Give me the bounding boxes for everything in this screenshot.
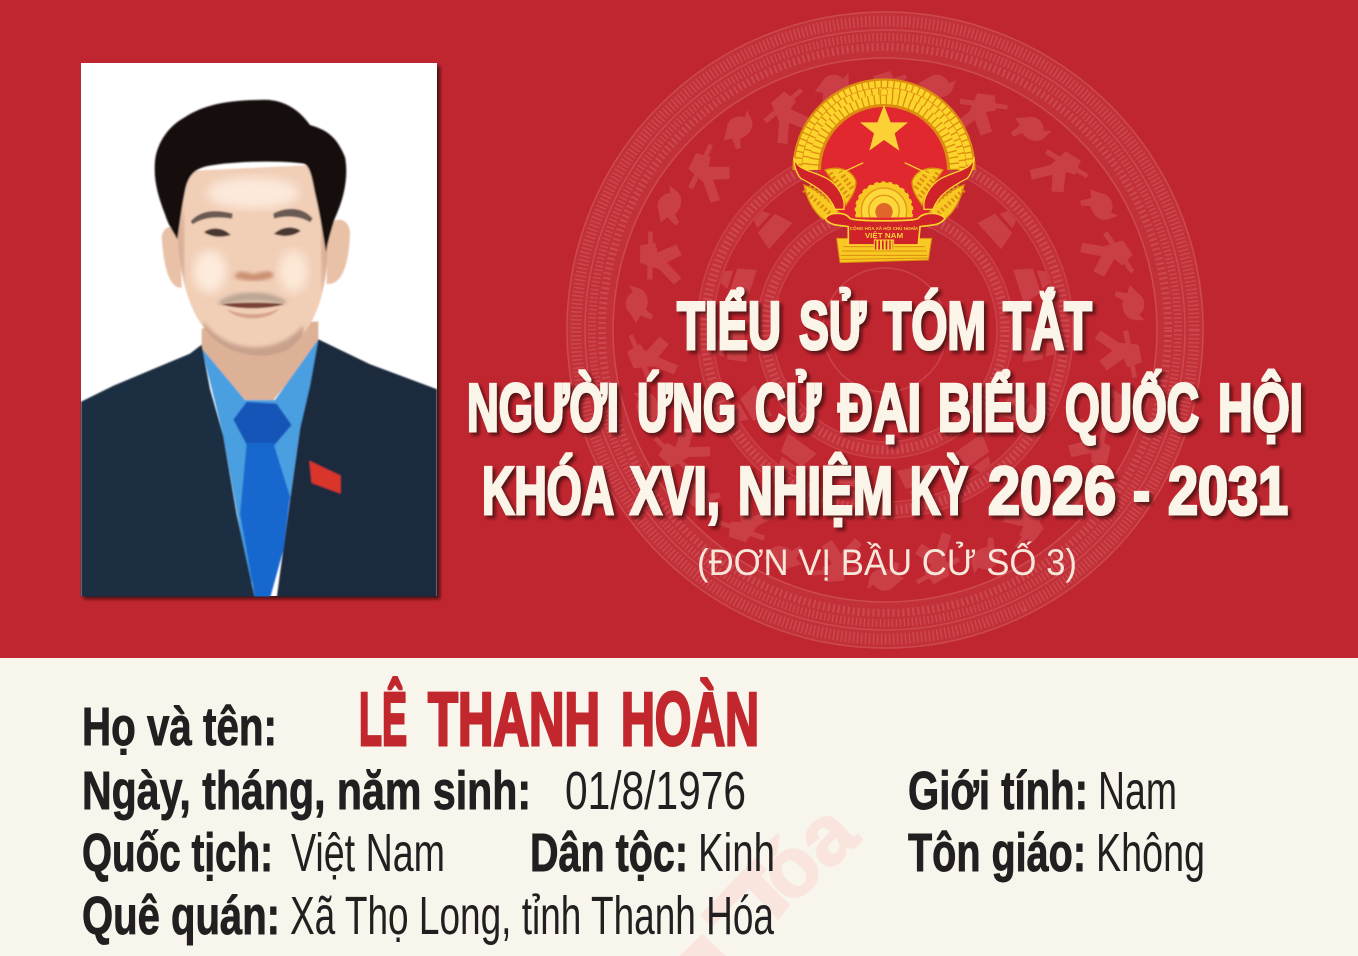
emblem text: VIỆT NAM: [865, 231, 903, 240]
gender label: Giới tính:: [908, 761, 1088, 821]
title line 2: [467, 369, 1303, 446]
bronze drum pattern: [543, 12, 1204, 677]
biography details: [82, 677, 1205, 946]
title line 1: TIỂU: [677, 287, 781, 364]
eyes: [204, 228, 301, 237]
title line 1: SỬ: [799, 287, 866, 364]
hometown label: Quê quán:: [82, 886, 280, 946]
eyebrows: [191, 209, 313, 224]
title line 1: [677, 287, 1092, 364]
religion label: Tôn giáo:: [908, 823, 1086, 883]
title line 3: KHÓA: [482, 453, 614, 529]
watermark: óa: [738, 784, 875, 920]
nationality: Việt Nam: [291, 823, 445, 883]
full name: THANH: [428, 677, 600, 761]
suit right: [277, 339, 437, 598]
star: [860, 105, 908, 151]
title line 3: [482, 452, 1288, 529]
nationality label: Quốc tịch:: [82, 823, 273, 883]
religion: Không: [1096, 823, 1205, 883]
ethnicity: Kinh: [698, 823, 775, 883]
body background: [0, 658, 1358, 956]
right wheat and ribbon: [905, 157, 974, 219]
full name: [359, 677, 759, 761]
wheat arch: [798, 84, 970, 170]
date of birth: 01/8/1976: [565, 761, 746, 821]
gear: [854, 181, 914, 218]
title line 2: HỘI: [1218, 369, 1303, 446]
title line 3: 2031: [1168, 453, 1288, 529]
ethnicity label: Dân tộc:: [530, 823, 688, 883]
emblem bars: [874, 240, 894, 250]
emblem text: CỘNG HÒA XÃ HỘI CHỦ NGHĨA: [850, 224, 919, 232]
left wheat and ribbon: [794, 157, 863, 219]
lapel pin: [309, 461, 341, 494]
emblem text: [850, 224, 919, 240]
subtitle: (ĐƠN VỊ BẦU CỬ SỐ 3): [697, 541, 1077, 583]
mouth: [222, 303, 284, 308]
face: [178, 164, 327, 356]
title line 2: CỬ: [755, 369, 821, 446]
title line 2: QUỐC: [1065, 369, 1199, 446]
title line 1: TÓM: [883, 288, 986, 364]
title: [467, 287, 1303, 529]
hair: [155, 100, 346, 252]
title line 2: NGƯỜI: [467, 370, 619, 446]
shirt: [202, 339, 318, 586]
title line 3: KỲ: [910, 453, 968, 529]
neck: [202, 321, 318, 400]
tie: [233, 402, 292, 446]
banner: [825, 213, 945, 245]
national emblem: [794, 84, 974, 263]
title line 1: TẮT: [1003, 287, 1092, 364]
suit left: [81, 345, 255, 598]
header background: [0, 0, 1358, 658]
ears: [162, 220, 350, 288]
title line 2: ĐẠI: [838, 370, 921, 446]
title line 2: ỨNG: [637, 370, 736, 446]
moustache: [218, 293, 287, 305]
title line 2: BIỂU: [938, 369, 1047, 446]
portrait photo: [81, 63, 437, 598]
title line 3: 2026: [988, 453, 1116, 529]
nose: [234, 271, 274, 281]
title line 3: XVI,: [630, 453, 720, 529]
full name label: Họ và tên:: [82, 697, 277, 757]
hometown: Xã Thọ Long, tỉnh Thanh Hóa: [290, 886, 775, 946]
full name: HOÀN: [621, 677, 759, 761]
title line 3: -: [1133, 453, 1150, 529]
date of birth label: Ngày, tháng, năm sinh:: [82, 761, 531, 821]
base: [837, 238, 932, 263]
watermark: [680, 784, 875, 956]
gender: Nam: [1098, 761, 1177, 821]
full name: LÊ: [359, 677, 407, 761]
title line 3: NHIỆM: [738, 452, 893, 529]
